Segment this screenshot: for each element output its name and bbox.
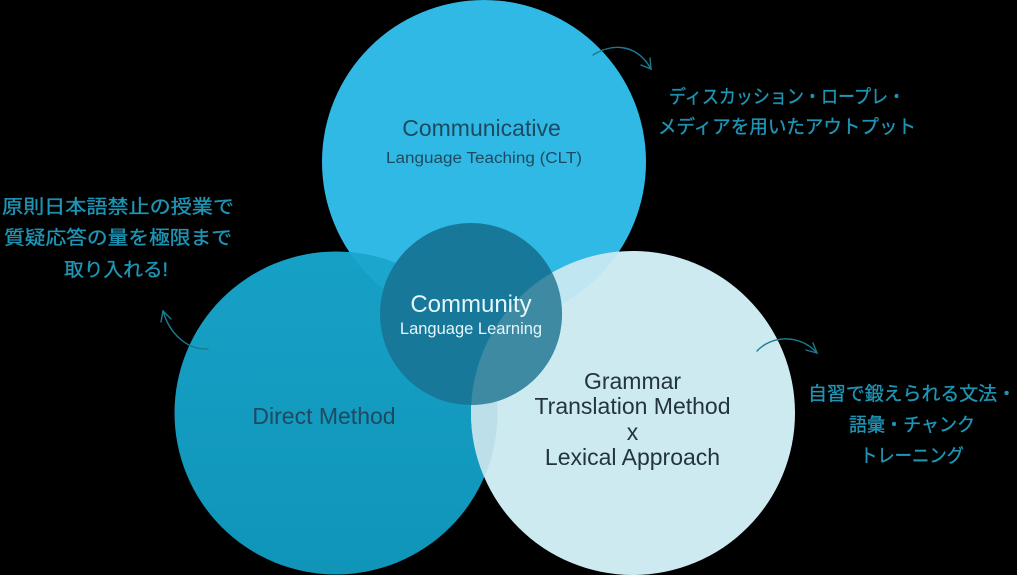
circle: Communicative Language Teaching — [322, 0, 646, 324]
label: Communicative: Language Teaching (CLT) — [386, 150, 582, 167]
label: Community — [400, 291, 542, 338]
annotation: left note: 取り入れる! — [64, 260, 168, 281]
arrow: left circle to note — [161, 311, 208, 349]
label: Communicative: Communicative — [402, 115, 561, 141]
annotation: top right note: メディアを用いたアウトプット — [658, 116, 916, 138]
annotation: left note — [2, 196, 234, 281]
overlap: top and left — [372, 278, 386, 288]
circle: Grammar Translation Method — [471, 251, 795, 575]
label: Grammar Translation Method x Lexical Approach: Grammar — [584, 368, 681, 394]
annotation: right note — [808, 383, 1016, 467]
annotation: top right note — [658, 86, 916, 138]
arrow: right circle to note — [757, 339, 817, 353]
annotation: left note: 原則日本語禁止の授業で — [2, 196, 234, 218]
annotation: left note: 質疑応答の量を極限まで — [4, 227, 232, 249]
overlap: left and right — [471, 402, 498, 478]
label: Grammar Translation Method x Lexical Approach: Lexical Approach — [545, 444, 720, 470]
label: Community: Community — [410, 291, 532, 318]
label: Direct Method: Direct Method — [252, 403, 396, 429]
label: Community: Language Learning — [400, 320, 542, 338]
annotation: right note: 語彙・チャンク — [849, 414, 975, 436]
label: Communicative — [386, 115, 582, 167]
annotation: right note: 自習で鍛えられる文法・ — [808, 383, 1016, 405]
arrow: top circle to note — [593, 47, 651, 69]
circle: Direct Method — [174, 252, 498, 574]
overlap: top and right — [552, 252, 619, 304]
annotation: right note: トレーニング — [860, 445, 964, 467]
label: Grammar Translation Method x Lexical Approach: Translation Method — [534, 393, 731, 419]
label: Grammar Translation Method x Lexical Approach — [534, 368, 731, 470]
label: Grammar Translation Method x Lexical Approach: x — [627, 419, 639, 445]
overlap: center and right — [471, 272, 562, 405]
annotation: top right note: ディスカッション・ロープレ・ — [669, 86, 905, 108]
circle: Community Language Learning — [380, 223, 562, 405]
